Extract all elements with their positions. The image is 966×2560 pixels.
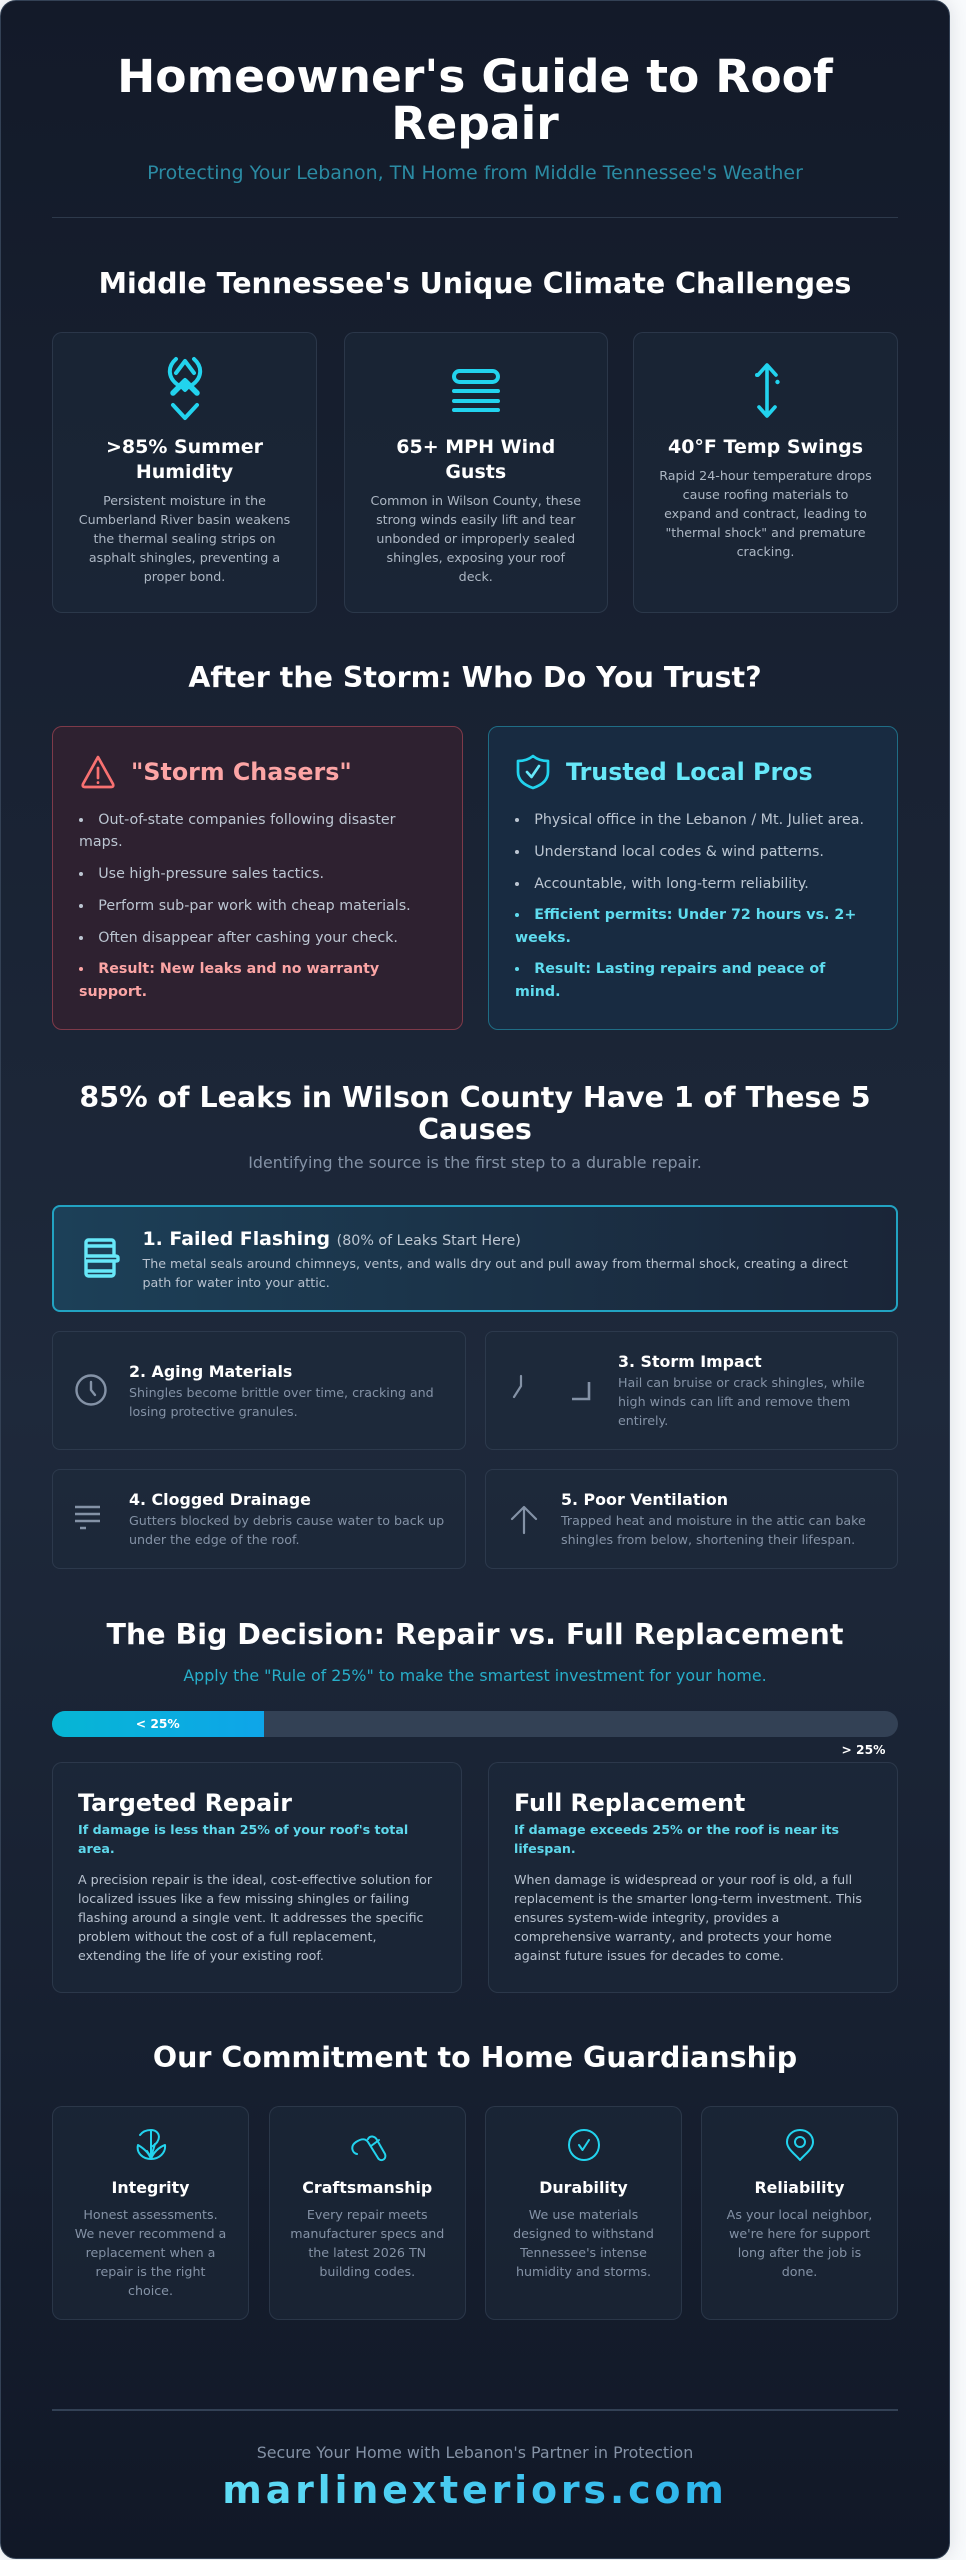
heading: targeted repair: Targeted Repair [78, 1789, 292, 1817]
text: integrity: repair is the right [96, 2264, 205, 2279]
description: clogged drainage: Gutters blocked by debris cause water to back up [129, 1513, 444, 1528]
heading: wind: Gusts [445, 461, 506, 483]
panel: craftsmanship [268, 2106, 466, 2320]
text: full replacement: ensures system-wide integrity, provides a [514, 1910, 779, 1925]
text: poor ventilation [560, 1490, 866, 1547]
panel: poor ventilation [485, 1469, 898, 1569]
text: full replacement: When damage is widespread or your roof is old, a full [514, 1872, 852, 1887]
heading: five causes: 85% of Leaks in Wilson County Have 1 of These 5 [79, 1081, 871, 1114]
heading: temperature: 40°F Temp Swings [668, 436, 863, 458]
list: trusted local pros: Understand local codes & wind patterns. [534, 844, 824, 860]
title: reliability: Reliability [754, 2178, 845, 2197]
list: storm chasers: Out-of-state companies following disaster [98, 812, 396, 828]
panel: storm chasers [52, 726, 462, 1030]
title: Repair [391, 97, 559, 150]
text: reliability: done. [782, 2264, 817, 2279]
text: craftsmanship: the latest 2026 TN [308, 2245, 426, 2260]
list: trusted local pros: Accountable, with long-term reliability. [534, 876, 809, 892]
icon: up arrow [510, 1506, 538, 1534]
heading: full replacement: Full Replacement [514, 1789, 745, 1817]
panel: temperature [633, 332, 898, 613]
text: humidity: the thermal sealing strips on [93, 531, 276, 546]
header divider [52, 217, 898, 218]
heading: wind: 65+ MPH Wind [396, 436, 555, 458]
list: trusted local pros: Result: Lasting repairs and peace of [534, 961, 825, 977]
text: integrity [75, 2207, 226, 2298]
title: clogged drainage: 4. Clogged Drainage [129, 1490, 311, 1509]
text: durability: We use materials [529, 2207, 638, 2222]
list: storm chasers: support. [79, 984, 147, 1000]
text: full replacement: comprehensive warranty, and protects your home [514, 1929, 832, 1944]
description: storm impact: high winds can lift and remove them [618, 1394, 850, 1409]
heading: wind [396, 436, 555, 483]
heading: humidity: Humidity [136, 461, 233, 483]
description: failed flashing: path for water into your attic. [142, 1274, 330, 1290]
icon: shield check [516, 754, 550, 790]
list: storm chasers: Perform sub-par work with cheap materials. [98, 898, 411, 914]
panel: targeted repair [52, 1762, 462, 1993]
icon: flashing [84, 1238, 120, 1278]
subheading: rule of 25: Apply the "Rule of 25%" to make the smartest investment for your home. [183, 1666, 767, 1685]
text: craftsmanship: Every repair meets [307, 2207, 428, 2222]
panel: aging materials [52, 1331, 466, 1450]
text: integrity: We never recommend a [75, 2226, 226, 2241]
description: clogged drainage: under the edge of the roof. [129, 1532, 300, 1547]
subheading: five causes: Identifying the source is the first step to a durable repair. [248, 1153, 702, 1172]
heading: commitment: Our Commitment to Home Guardianship [153, 2041, 797, 2074]
text: aging materials [129, 1362, 434, 1419]
icon: clock [75, 1374, 107, 1406]
condition: full replacement: lifespan. [514, 1841, 576, 1856]
text: humidity: proper bond. [144, 569, 225, 584]
text: targeted repair [78, 1872, 432, 1963]
text: wind: unbonded or improperly sealed [376, 531, 575, 546]
heading: repair vs replacement: The Big Decision: Repair vs. Full Replacement [107, 1618, 843, 1651]
panel: wind [344, 332, 608, 613]
footer divider [52, 2409, 898, 2410]
icon: temperature [755, 363, 780, 418]
text: integrity: choice. [128, 2283, 173, 2298]
heading: climate challenges: Middle Tennessee's Unique Climate Challenges [99, 267, 851, 300]
title: craftsmanship: Craftsmanship [302, 2178, 432, 2197]
text: temperature: Rapid 24-hour temperature drops [659, 468, 872, 483]
text: humidity: Persistent moisture in the [103, 493, 266, 508]
description: poor ventilation [560, 1513, 866, 1547]
text: targeted repair: extending the life of your existing roof. [78, 1948, 324, 1963]
title: integrity: Integrity [112, 2178, 189, 2197]
heading: humidity: >85% Summer [106, 436, 263, 458]
condition: targeted repair: area. [78, 1841, 115, 1856]
text: temperature [659, 468, 872, 559]
list: storm chasers [79, 812, 411, 1000]
title: Homeowner's Guide to Roof [117, 50, 833, 103]
condition: targeted repair: If damage is less than 25% of your roof's total [78, 1822, 408, 1837]
text: temperature: "thermal shock" and premature [665, 525, 866, 540]
text: targeted repair: A precision repair is the ideal, cost-effective solution for [78, 1872, 432, 1887]
website: marlinexteriors.com [222, 2468, 728, 2512]
text: wind: Common in Wilson County, these [370, 493, 581, 508]
description: clogged drainage [129, 1513, 444, 1547]
text: failed flashing [142, 1228, 848, 1290]
heading: trusted local pros: Trusted Local Pros [566, 758, 813, 786]
icon: humidity [168, 356, 202, 420]
condition: full replacement [514, 1822, 839, 1856]
text: storm impact [618, 1352, 865, 1428]
text: full replacement: replacement is the smarter long-term investment. This [514, 1891, 862, 1906]
panel: clogged drainage [52, 1469, 466, 1569]
subtitle: Protecting Your Lebanon, TN Home from Middle Tennessee's Weather [147, 162, 803, 184]
description: failed flashing [142, 1256, 848, 1290]
panel: failed flashing [52, 1205, 898, 1312]
icon: warning triangle [81, 756, 115, 788]
text: full replacement [514, 1872, 862, 1963]
list: storm chasers: Often disappear after cashing your check. [98, 930, 398, 946]
text: craftsmanship: building codes. [319, 2264, 415, 2279]
title [117, 50, 834, 150]
website [1, 2466, 949, 2514]
label: over 25 percent: > 25% [841, 1743, 886, 1757]
footer tagline: Secure Your Home with Lebanon's Partner in Protection [257, 2443, 693, 2462]
bar fill: under 25 percent [52, 1711, 264, 1737]
panel: integrity [52, 2106, 249, 2320]
icon: wind [452, 369, 500, 412]
text: wind: shingles, exposing your roof [386, 550, 565, 565]
text: clogged drainage [129, 1490, 444, 1547]
panel: humidity [52, 332, 317, 613]
text: reliability: we're here for support [729, 2226, 870, 2241]
list: storm chasers: maps. [79, 834, 123, 850]
title: storm impact: 3. Storm Impact [618, 1352, 762, 1371]
icon: drainage [75, 1506, 100, 1530]
icon: storm impact [512, 1374, 590, 1400]
description: storm impact: Hail can bruise or crack shingles, while [618, 1375, 865, 1390]
condition: targeted repair [78, 1822, 408, 1856]
description: aging materials: losing protective granules. [129, 1404, 298, 1419]
text: humidity [79, 493, 290, 584]
description: aging materials: Shingles become brittle over time, cracking and [129, 1385, 434, 1400]
title: durability: Durability [539, 2178, 628, 2197]
icon: craftsmanship [351, 2136, 386, 2162]
description: aging materials [129, 1385, 434, 1419]
text: durability: Tennessee's intense [520, 2245, 647, 2260]
heading: five causes [79, 1081, 871, 1146]
description: storm impact [618, 1375, 865, 1428]
chart: 25 percent bar [52, 1711, 898, 1737]
text: durability: humidity and storms. [516, 2264, 651, 2279]
panel: full replacement [488, 1762, 898, 1993]
text: wind: deck. [459, 569, 493, 584]
heading: humidity [106, 436, 263, 483]
text: temperature: expand and contract, leading to [664, 506, 867, 521]
text: craftsmanship: manufacturer specs and [290, 2226, 444, 2241]
description: poor ventilation: shingles from below, shortening their lifespan. [561, 1532, 855, 1547]
text: integrity: replacement when a [86, 2245, 215, 2260]
description: storm impact: entirely. [618, 1413, 668, 1428]
title: poor ventilation: 5. Poor Ventilation [561, 1490, 728, 1509]
panel: trusted local pros [488, 726, 898, 1030]
text: durability [513, 2207, 654, 2279]
text: targeted repair: problem without the cost of a full replacement, [78, 1929, 376, 1944]
text: wind [370, 493, 581, 584]
icon: reliability [786, 2129, 814, 2161]
panel: storm impact [485, 1331, 898, 1450]
list: trusted local pros: weeks. [515, 930, 571, 946]
text: wind: strong winds easily lift and tear [376, 512, 575, 527]
list: storm chasers: Result: New leaks and no warranty [98, 961, 379, 977]
text: craftsmanship [290, 2207, 444, 2279]
text: durability: designed to withstand [513, 2226, 654, 2241]
text: reliability [702, 2205, 897, 2281]
text: full replacement: against future issues for decades to come. [514, 1948, 784, 1963]
heading: storm chasers: "Storm Chasers" [131, 758, 352, 786]
text: targeted repair: flashing around a single vent. It addresses the specific [78, 1910, 424, 1925]
description: failed flashing: The metal seals around chimneys, vents, and walls dry out and pull away from thermal shock, creating a direct [142, 1256, 848, 1270]
icon: durability [568, 2129, 600, 2161]
condition: full replacement: If damage exceeds 25% or the roof is near its [514, 1822, 839, 1837]
list: trusted local pros: Physical office in the Lebanon / Mt. Juliet area. [534, 812, 864, 828]
text: integrity: Honest assessments. [83, 2207, 218, 2222]
text: humidity: asphalt shingles, preventing a [89, 550, 280, 565]
text: temperature: cause roofing materials to [683, 487, 848, 502]
list: trusted local pros [515, 812, 864, 1000]
icon: integrity [136, 2129, 166, 2160]
heading: failed flashing: 1. Failed Flashing (80% of Leaks Start Here) [142, 1228, 521, 1250]
description: poor ventilation: Trapped heat and moisture in the attic can bake [561, 1513, 866, 1528]
text: reliability: long after the job is [738, 2245, 861, 2260]
bar fill: under 25 percent: < 25% [136, 1717, 180, 1731]
text: reliability: As your local neighbor, [727, 2207, 872, 2222]
list: trusted local pros: Efficient permits: Under 72 hours vs. 2+ [534, 907, 856, 923]
title: aging materials: 2. Aging Materials [129, 1362, 292, 1381]
text: targeted repair: localized issues like a few missing shingles or failing [78, 1891, 409, 1906]
text: humidity: Cumberland River basin weakens [79, 512, 290, 527]
panel: reliability [701, 2106, 898, 2320]
list: storm chasers: Use high-pressure sales tactics. [98, 866, 324, 882]
heading: who do you trust: After the Storm: Who Do You Trust? [188, 661, 762, 694]
panel: durability [485, 2106, 682, 2320]
list: trusted local pros: mind. [515, 984, 560, 1000]
heading: five causes: Causes [418, 1113, 532, 1146]
text: temperature: cracking. [737, 544, 794, 559]
